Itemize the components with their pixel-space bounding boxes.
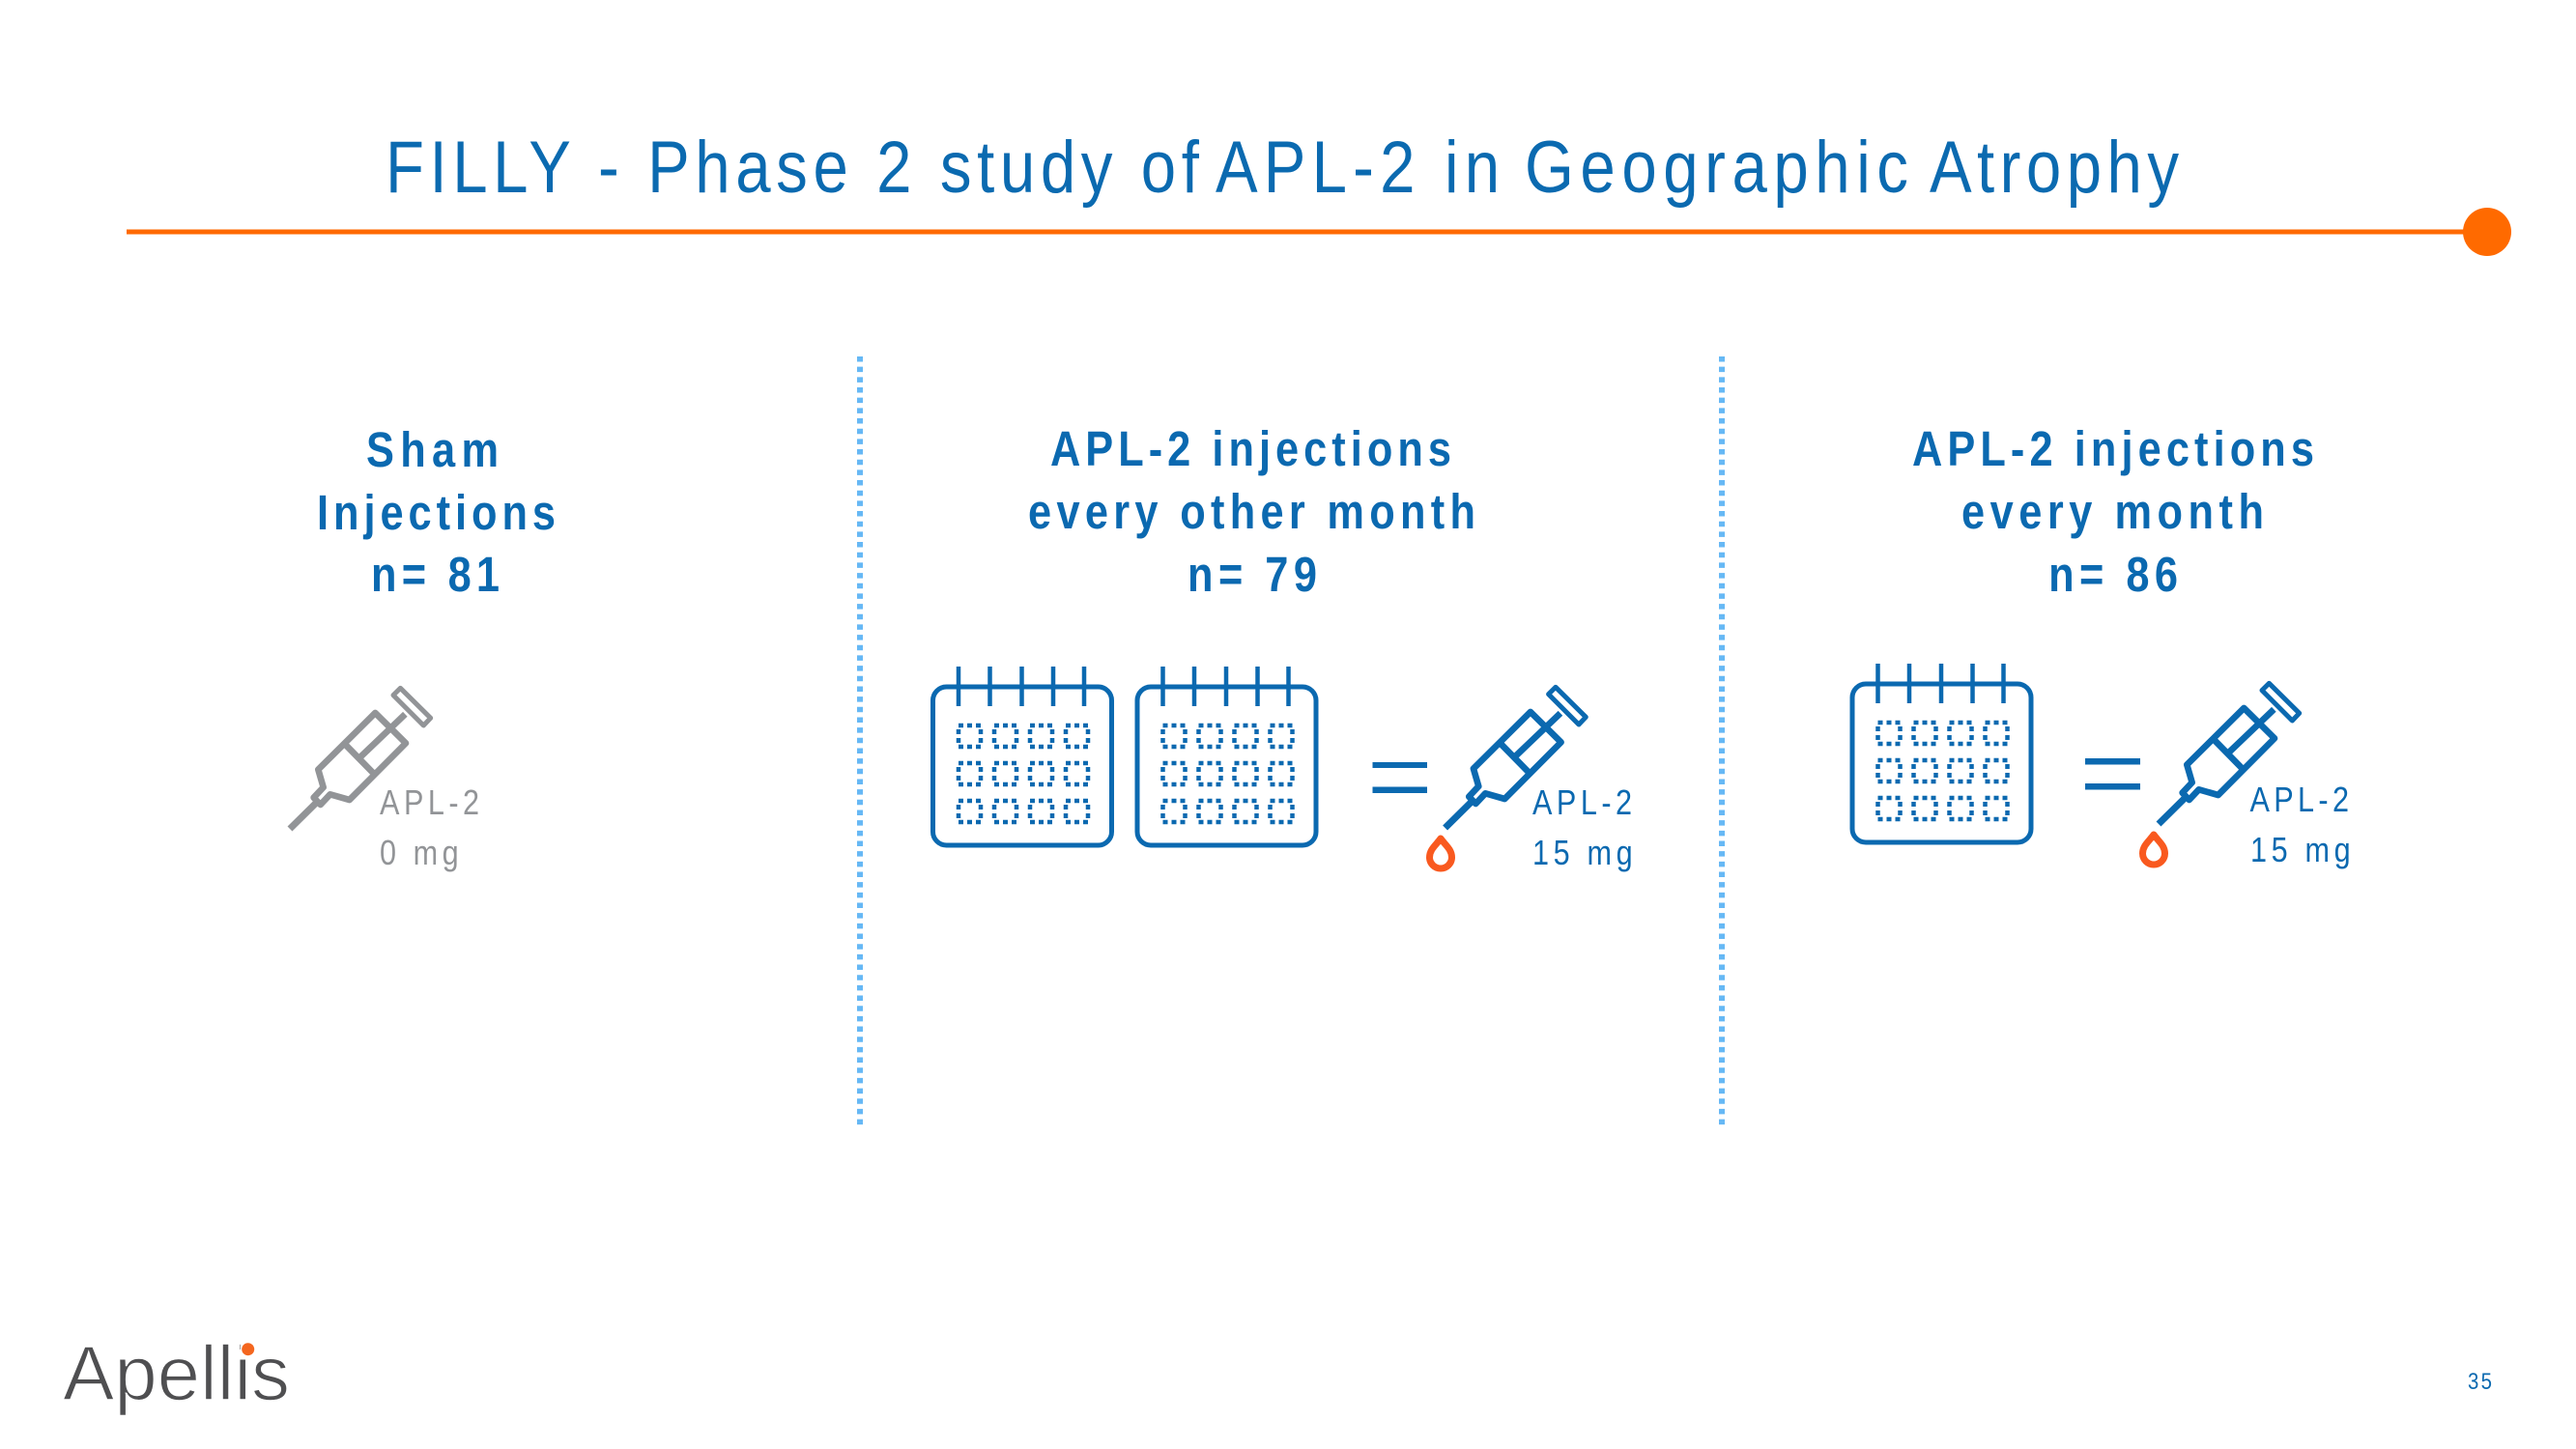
panel: every other month	[933, 422, 1633, 873]
dose label: 0 mg: 0 mg	[380, 835, 459, 873]
dose label: 15 mg	[2249, 781, 2351, 870]
heading: every month: n= 86	[2048, 548, 2178, 603]
heading: every other month	[1028, 422, 1475, 603]
dose label: 15 mg	[1532, 784, 1633, 873]
panel: every month	[1852, 422, 2351, 870]
panel: sham injections	[290, 423, 556, 873]
icon: orange drop	[1430, 838, 1451, 868]
page number: 35	[2468, 1368, 2492, 1394]
title: FILLY - Phase 2 study of	[386, 127, 1199, 209]
title rule with orange dot	[127, 208, 2511, 256]
heading: every other month: n= 79	[1188, 548, 1317, 603]
dose label: 15 mg: 15 mg	[1532, 835, 1633, 873]
equals sign	[1372, 762, 1427, 793]
icon: calendar	[1852, 664, 2031, 842]
heading: every month	[1912, 422, 2314, 603]
heading: every other month: every other month	[1028, 485, 1475, 540]
icon: calendar 2	[1137, 667, 1316, 845]
heading: sham: Injections	[317, 486, 556, 541]
heading: every month: every month	[1961, 485, 2264, 540]
logo: Apellis: Apellis	[63, 1330, 290, 1416]
heading: every month: APL-2 injections	[1912, 422, 2314, 477]
dose label: 15 mg: 15 mg	[2250, 832, 2351, 870]
title: Geographic	[1525, 127, 1908, 209]
icon: blue syringe	[1445, 687, 1586, 828]
icon: calendar 1	[933, 667, 1111, 845]
title: Atrophy	[1930, 127, 2180, 209]
title	[386, 127, 2180, 209]
heading: sham: n= 81	[371, 548, 500, 603]
dose label: 0 mg: APL-2	[380, 784, 479, 823]
equals sign	[2085, 758, 2140, 790]
heading: sham	[317, 423, 556, 603]
dose label: 0 mg	[380, 784, 479, 873]
heading: every other month: APL-2 injections	[1050, 422, 1451, 477]
dose label: 15 mg: APL-2	[1532, 784, 1632, 823]
icon: orange drop	[2143, 835, 2164, 865]
title: APL-2 in	[1216, 127, 1500, 209]
icon: blue syringe	[2159, 683, 2300, 824]
icon: grey syringe	[290, 688, 431, 829]
heading: sham: Sham	[366, 423, 499, 478]
dose label: 15 mg: APL-2	[2249, 781, 2349, 820]
